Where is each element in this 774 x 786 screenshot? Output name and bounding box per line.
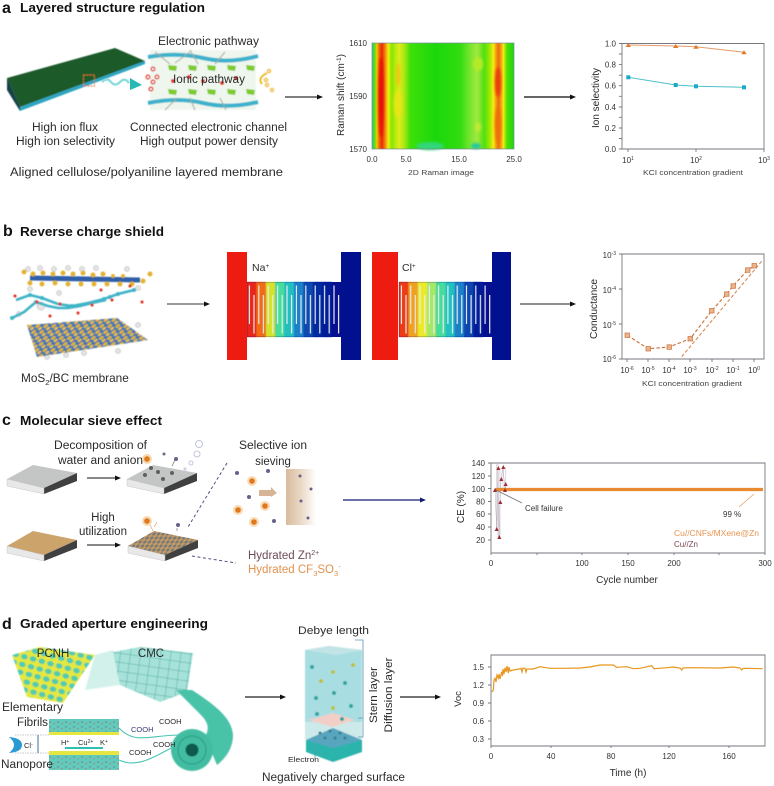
Raman axis labels: 2D Raman image <box>408 168 474 177</box>
chart: conductance: -3 <box>692 366 697 372</box>
text: decomposition of water and anion: Decomposition of <box>54 440 148 452</box>
chart: coulombic efficiency: 120 <box>472 472 486 481</box>
chart: ion selectivity: 10 <box>758 156 767 165</box>
arrow d2 <box>400 694 441 700</box>
Raman axis labels: 15.0 <box>451 155 467 164</box>
panel label a: a <box>2 0 11 17</box>
chart: open circuit voltage: 0.9 <box>473 699 485 708</box>
zoom dashed lines <box>188 463 236 563</box>
chart: coulombic efficiency <box>456 459 772 586</box>
chart: coulombic efficiency: 20 <box>476 536 486 545</box>
panel c: molecular sieve effect <box>2 412 772 586</box>
chart: conductance: Conductance <box>589 279 600 339</box>
panel label b: b <box>3 223 13 240</box>
chart: coulombic efficiency: 80 <box>476 498 486 506</box>
panel label c: c <box>2 412 11 429</box>
illustration: ionic and electronic pathway <box>146 50 274 110</box>
legend: hydrated ions: 3 <box>313 569 317 578</box>
chart: ion selectivity: 3 <box>767 156 770 162</box>
chart: open circuit voltage: 1.5 <box>473 663 485 672</box>
arrow a1 <box>285 94 323 100</box>
chart: coulombic efficiency: 200 <box>667 559 681 568</box>
plate: coated Zn with nanopillars <box>128 516 198 561</box>
Raman axis labels: 1570 <box>349 145 368 154</box>
text: selective ion sieving: sieving <box>255 456 291 468</box>
text: Debye length: Debye length <box>298 625 369 637</box>
simulation: Cl- nanochannel: + <box>412 263 416 270</box>
heading b: Reverse charge shield <box>20 225 164 239</box>
chart: open circuit voltage: Voc <box>453 691 464 707</box>
heading a: Layered structure regulation <box>20 1 205 15</box>
illustration: elementary fibrils and nanopore: COOH <box>153 740 176 749</box>
Raman axis labels: 1610 <box>349 39 368 48</box>
chart: conductance: 10 <box>662 366 671 375</box>
chart: coulombic efficiency: 40 <box>476 523 486 532</box>
text: CMC: CMC <box>138 648 164 660</box>
chart: coulombic efficiency: 100 <box>575 559 589 568</box>
heading c: Molecular sieve effect <box>20 414 163 428</box>
chart: conductance: -2 <box>714 366 719 372</box>
illustration: elementary fibrils and nanopore: COOH <box>131 725 154 734</box>
simulation: Na+ nanochannel <box>227 252 361 360</box>
text: MoS2/BC membrane: 2 <box>45 378 49 387</box>
simulation: Na+ nanochannel: Na <box>252 262 265 274</box>
chart: ion selectivity: 10 <box>622 156 631 165</box>
panel a: layered structure regulation <box>2 0 770 179</box>
illustration: MoS2/BC membrane structure <box>10 266 152 360</box>
illustration: elementary fibrils and nanopore: + <box>66 739 69 745</box>
arrow b2 <box>520 302 576 306</box>
chart: conductance: 10 <box>641 366 650 375</box>
illustration: elementary fibrils and nanopore: COOH <box>129 748 152 757</box>
Raman axis labels: -1 <box>336 57 343 63</box>
chart: conductance: -5 <box>612 321 616 327</box>
arrow c2 <box>87 542 121 548</box>
plate: bare Zn top left <box>7 465 77 494</box>
chart: ion selectivity: 0.8 <box>605 60 617 70</box>
text: connected electronic channel: Connected electronic channel <box>130 122 287 134</box>
chart: open circuit voltage: Time (h) <box>610 768 646 779</box>
chart: conductance: 10 <box>726 366 735 375</box>
chart: ion selectivity: 1.0 <box>605 40 617 48</box>
chart: ion selectivity <box>591 40 770 177</box>
Raman axis labels: 5.0 <box>400 155 412 164</box>
illustration: elementary fibrils and nanopore: K <box>100 738 105 747</box>
chart: ion selectivity: Ion selectivity <box>591 68 602 128</box>
simulation: Cl- nanochannel: Cl <box>402 262 412 274</box>
text: decomposition of water and anion <box>54 440 148 467</box>
Raman axis labels: Raman shift (cm <box>336 63 347 136</box>
chart: conductance: -3 <box>612 251 616 257</box>
chart: conductance: -5 <box>650 366 655 372</box>
chart: conductance: -4 <box>612 286 616 292</box>
legend: hydrated ions: Hydrated CF <box>248 564 313 576</box>
text: selective ion sieving <box>239 440 307 468</box>
chart: conductance: -4 <box>671 366 676 372</box>
panel d: graded aperture engineering <box>1 616 765 784</box>
text: negatively charged surface: Negatively charged surface <box>262 772 405 784</box>
simulation: Cl- nanochannel <box>372 252 511 360</box>
chart: coulombic efficiency: 300 <box>758 559 772 568</box>
text: ionic pathway: Ionic pathway <box>173 74 245 86</box>
arrow a2 <box>524 94 576 100</box>
chart: open circuit voltage: 1.2 <box>473 681 485 690</box>
chart: open circuit voltage: 120 <box>662 752 676 761</box>
chart: ion selectivity: 10 <box>690 156 699 165</box>
chart: open circuit voltage <box>453 655 765 779</box>
chart: conductance: -6 <box>629 366 634 372</box>
illustration: Debye layer box <box>305 646 362 762</box>
chart: open circuit voltage: 0.6 <box>473 717 485 726</box>
chart: ion selectivity: KCI concentration gradient <box>643 168 744 177</box>
chart: ion selectivity: 0.0 <box>605 145 617 154</box>
arrow c3 <box>343 498 426 502</box>
illustration: elementary fibrils and nanopore: H <box>61 738 66 747</box>
chart: open circuit voltage: 0.3 <box>473 735 485 744</box>
simulation: Na+ nanochannel: + <box>265 263 269 270</box>
text: high ion selectivity: High ion selectivity <box>16 136 115 148</box>
Raman axis labels <box>336 39 522 177</box>
Raman axis labels: 0.0 <box>366 155 378 164</box>
icon: teal wavy arrow <box>102 78 142 90</box>
chart: coulombic efficiency: 140 <box>472 459 486 468</box>
text: selective ion sieving: Selective ion <box>239 440 307 452</box>
chart: open circuit voltage: 80 <box>607 752 616 761</box>
text: high ion flux: High ion flux <box>32 122 98 134</box>
chart: conductance: 10 <box>603 321 612 330</box>
legend: hydrated ions: SO <box>317 564 334 576</box>
chart: conductance <box>589 251 764 388</box>
heading d: Graded aperture engineering <box>20 617 208 631</box>
Raman axis labels: 1590 <box>349 92 368 101</box>
plate: decomposed Zn top right <box>127 460 197 494</box>
text: Diffusion layer: Diffusion layer <box>383 657 395 732</box>
text: high utilization <box>79 512 127 538</box>
text: high output power density: High output power density <box>140 136 278 148</box>
text: electronic pathway: Electronic pathway <box>158 36 259 48</box>
chart: coulombic efficiency: Cu//Zn <box>674 540 698 549</box>
chart: conductance: -1 <box>735 366 740 372</box>
text: decomposition of water and anion: water and anion <box>57 455 143 467</box>
illustration: elementary fibrils and nanopore: Cl <box>24 741 31 750</box>
chart: ion selectivity: 0.6 <box>605 82 617 91</box>
chart: open circuit voltage: 160 <box>722 752 736 761</box>
panel b: reverse charge shield <box>3 223 764 388</box>
chart: conductance: KCI concentration gradient <box>642 379 743 388</box>
chart: open circuit voltage: 0 <box>489 752 494 761</box>
icon: ions and gas bubbles <box>142 440 202 470</box>
text: Stern layer: Stern layer <box>368 667 380 723</box>
chart: conductance: 10 <box>603 251 612 260</box>
chart: coulombic efficiency: CE (%) <box>456 491 467 523</box>
arrow b1 <box>167 302 210 306</box>
bracket: Stern and diffusion layers <box>315 640 363 760</box>
arrow c1 <box>87 476 121 480</box>
chart: coulombic efficiency: 60 <box>476 510 486 519</box>
panel label d: d <box>2 616 12 633</box>
text: elementary fibrils: Elementary <box>2 702 63 714</box>
illustration: green membrane sheet <box>7 48 145 111</box>
text: membrane caption: Aligned cellulose/polyaniline layered membrane <box>10 167 283 179</box>
Raman axis labels: 25.0 <box>506 155 522 164</box>
illustration: elementary fibrils and nanopore <box>9 717 182 770</box>
legend: hydrated ions: - <box>338 562 341 571</box>
illustration: elementary fibrils and nanopore: + <box>105 739 108 745</box>
illustration: elementary fibrils and nanopore: 2+ <box>88 739 93 745</box>
chart: conductance: 10 <box>705 366 714 375</box>
chart: conductance: 10 <box>603 286 612 295</box>
text: high utilization: utilization <box>79 526 127 538</box>
chart: conductance: 0 <box>757 366 760 372</box>
text: elementary fibrils <box>2 702 63 729</box>
heatmap: 2D Raman image <box>372 43 514 150</box>
text: elementary fibrils: Fibrils <box>17 717 48 729</box>
chart: coulombic efficiency: 150 <box>621 559 635 568</box>
chart: coulombic efficiency: Cycle number <box>596 575 659 586</box>
text: MoS2/BC membrane: MoS <box>21 371 45 385</box>
illustration: elementary fibrils and nanopore: Cu <box>78 738 88 747</box>
chart: coulombic efficiency: Cell failure <box>525 504 563 513</box>
illustration: elementary fibrils and nanopore: COOH <box>159 717 182 726</box>
chart: ion selectivity: 0.2 <box>605 124 617 133</box>
chart: ion selectivity: 1 <box>631 156 634 162</box>
text: MoS2/BC membrane: /BC membrane <box>49 371 129 385</box>
legend: hydrated ions <box>248 550 341 578</box>
chart: ion selectivity: 2 <box>699 156 702 162</box>
chart: conductance: 10 <box>603 355 612 364</box>
chart: coulombic efficiency: 99 % <box>723 510 741 519</box>
illustration: elementary fibrils and nanopore: - <box>31 742 33 748</box>
chart: coulombic efficiency: 0 <box>489 559 494 568</box>
text: high utilization: High <box>91 512 115 524</box>
Raman axis labels: ) <box>336 54 347 57</box>
text: nanopore: Nanopore <box>1 759 53 771</box>
chart: ion selectivity: 0.4 <box>605 103 617 112</box>
illustration: PCNH and CMC cubes <box>12 647 233 771</box>
chart: open circuit voltage: 40 <box>547 752 556 761</box>
legend: hydrated ions: 2+ <box>311 550 319 557</box>
chart: conductance: 10 <box>620 366 629 375</box>
plate: coated Zn bottom left <box>7 531 77 561</box>
illustration: ion sieving layer <box>233 469 316 527</box>
legend: hydrated ions: 3 <box>334 569 338 578</box>
chart: conductance: -6 <box>612 355 616 361</box>
arrow d1 <box>245 694 286 700</box>
chart: conductance: 10 <box>748 366 757 375</box>
chart: coulombic efficiency: Cu//CNFs/MXene@Zn <box>674 529 759 538</box>
chart: coulombic efficiency: 100 <box>472 485 486 494</box>
text: PCNH: PCNH <box>37 648 69 660</box>
text: Electron: Electron <box>288 755 319 764</box>
legend: hydrated ions: Hydrated Zn <box>248 550 311 562</box>
chart: conductance: 10 <box>683 366 692 375</box>
